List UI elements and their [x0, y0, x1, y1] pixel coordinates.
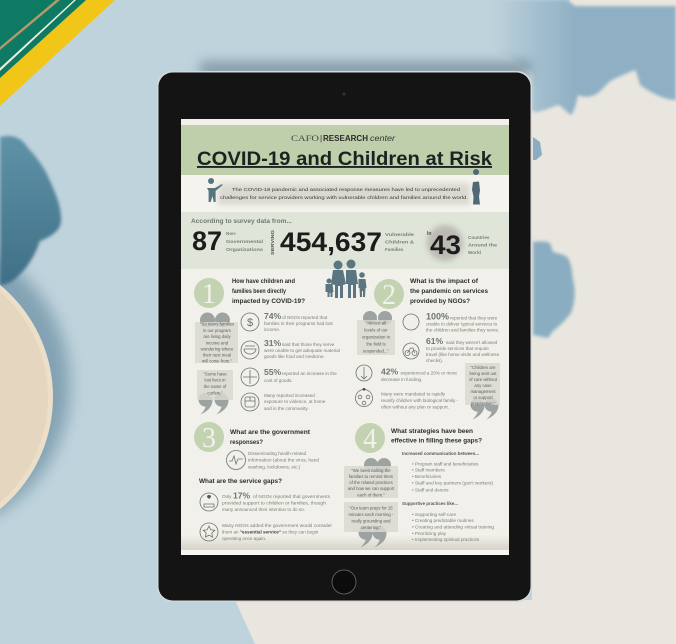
quote: calling the families: of the related practices	[349, 480, 393, 485]
list: increased communication	[402, 451, 493, 492]
list: supportive practices	[402, 501, 494, 542]
quote: children sent out of care: "Children are	[471, 365, 496, 370]
stat: 87	[192, 226, 264, 256]
item: essential service: Many NGOs added the government would consider	[222, 523, 332, 528]
background: plate shadow	[0, 235, 70, 535]
stat: 31% material goods: 31%	[264, 338, 282, 348]
logo line: center	[370, 134, 395, 143]
stat: 100%: 100%	[426, 312, 449, 322]
stat: violence exposure	[241, 393, 326, 411]
stat: 61%: to provide services that require	[426, 346, 489, 351]
list: supportive practices: • Supporting self-care	[412, 512, 456, 517]
quote: children sent out of care: of care without	[469, 377, 498, 382]
item: disseminating information: information (about the virus, hand	[248, 458, 319, 462]
item: disseminating information: washing, lockdowns, etc.)	[248, 464, 301, 470]
title: COVID-19 and Children at Risk	[197, 149, 492, 170]
quote: families losing income: are living daily	[203, 334, 231, 339]
tablet body	[157, 71, 532, 602]
item: 17%: provided support to children or families, though	[222, 500, 326, 506]
heading 3: What are the government	[230, 429, 311, 436]
stat: 42%: decrease in funding.	[381, 377, 422, 382]
quote: families losing income: income and	[206, 340, 229, 346]
quote: work suspended: suspended..."	[363, 348, 390, 354]
logo line	[291, 134, 395, 143]
quote: children sent out of care: preparation."	[471, 401, 496, 406]
item: 17%: Only	[222, 494, 232, 499]
quote: calling the families: and how we can support	[348, 486, 395, 491]
quote: lives lost	[197, 370, 233, 414]
quote: families losing income: their next meal	[203, 352, 231, 358]
stat: 61%: 61%	[426, 336, 444, 346]
stat: reunify children: often without any plan or support.	[381, 404, 449, 410]
stat: 43 countries: 43	[430, 230, 461, 260]
list: increased communication: • Staff and key partners (gov't workers)	[412, 480, 493, 486]
stat: 100%: the children and families they serve.	[426, 328, 499, 332]
survey heading: According to survey data from...	[191, 219, 292, 225]
quote: families losing income: will come from."	[202, 358, 233, 364]
stat: 100%: unable to deliver typical services to	[426, 322, 498, 326]
item: 17%	[200, 490, 331, 512]
stat: 74% income: of NGOs reported that	[282, 315, 328, 320]
quote: work suspended: "Almost all	[366, 320, 386, 326]
quote: team prays: minutes each morning -	[349, 512, 394, 517]
stat: 42%	[356, 365, 457, 382]
intro bar: The COVID-19 pandemic and associated response measures have led to unprecedented	[232, 187, 460, 193]
quote: calling the families	[344, 458, 398, 498]
quote: lives lost: the name of	[204, 384, 227, 389]
item: 17%: of NGOs reported that governments	[253, 494, 331, 499]
quote: team prays: really grounding and	[352, 518, 391, 524]
stat: violence exposure: exposure to violence, at home	[264, 399, 326, 404]
stat: reunify children	[356, 388, 459, 410]
quote: families losing income: "So many families	[200, 322, 234, 326]
quote: families losing income: in our program	[203, 328, 231, 333]
stat: 87: Organizations	[226, 247, 264, 252]
stat: 454,637: Children &	[385, 240, 415, 244]
stat: 43 countries: Around the	[468, 242, 498, 248]
quote: work suspended	[357, 311, 395, 355]
book spine corner	[0, 0, 115, 106]
stat: 55% cost of goods	[241, 367, 337, 386]
quote: team prays	[344, 502, 398, 548]
intro bar	[181, 169, 509, 212]
stat: 74% income: families in their programs had lost	[264, 321, 333, 326]
quote: children sent out of care: management	[470, 389, 496, 394]
quote: children sent out of care: being sent out	[470, 371, 497, 376]
stat: 31% material goods: said that those they serve	[282, 342, 335, 347]
stat: 87: Non-	[226, 231, 237, 236]
serving label: SERVING	[270, 229, 275, 255]
item: essential service	[200, 523, 332, 541]
bottom fade	[181, 535, 509, 550]
heading 2: What is the impact of	[410, 278, 479, 285]
stat: 454,637: Vulnerable	[385, 232, 415, 237]
stat: 454,637: Families	[385, 247, 404, 252]
stat: violence exposure: Many reported increased	[264, 393, 315, 398]
quote: team prays: "Our team prays for 15	[349, 506, 393, 510]
number badge 2: 2	[382, 280, 396, 311]
quote: calling the families: "We been calling the	[351, 468, 391, 473]
quote: work suspended: organization in	[362, 334, 391, 340]
section 2: impact on services	[356, 278, 500, 420]
stat: reunify children: reunify children with biological family -	[381, 398, 459, 403]
stat: 42%: 42%	[381, 366, 399, 376]
bottom strip	[181, 550, 509, 555]
quote: children sent out of care: any case	[474, 383, 492, 388]
background: dark blue stain left	[0, 136, 61, 285]
stat: 100%	[403, 312, 499, 332]
number badge 4	[355, 423, 385, 455]
stat: 55% cost of goods: 55%	[264, 367, 282, 377]
quote: work suspended: levels of our	[364, 328, 388, 332]
saucer plate	[0, 252, 53, 542]
stat: 454,637: 454,637	[280, 227, 382, 257]
stat: 61%: travel (like home visits and wellness	[426, 352, 500, 357]
list: increased communication: • Program staff and beneficiaries	[412, 462, 479, 466]
stat: 74% income: income.	[264, 327, 280, 332]
heading 4: What strategies have been	[391, 428, 473, 435]
stat: reunify children: Many were mandated to rapidly	[381, 392, 446, 396]
number badge 4: 4	[363, 424, 377, 455]
quote: lives lost: "Some have	[203, 372, 227, 376]
quote: calling the families: families to remind them	[349, 474, 394, 479]
list: increased communication: • Beneficiaries	[412, 474, 442, 479]
tablet shadow	[200, 62, 530, 76]
icon: child figure	[207, 178, 223, 202]
list: increased communication: • Staff members	[412, 468, 445, 472]
list: supportive practices: Supportive practices like...	[402, 501, 458, 506]
stat: 87: Governmental	[226, 239, 263, 244]
section 4: effective strategies	[344, 423, 494, 548]
list: supportive practices: • Implementing spiritual practices	[412, 537, 480, 542]
quote: families losing income	[195, 312, 238, 364]
stat: 74% income	[241, 311, 333, 332]
item: 17%: 17%	[233, 490, 251, 500]
quote: lives lost: curfew."	[207, 390, 223, 396]
heading 3: responses?	[230, 439, 263, 446]
quote: work suspended: the field is	[366, 342, 386, 346]
quote: calling the families: each of them."	[357, 492, 385, 498]
item: 17%: many announced their intention to do so.	[222, 507, 305, 512]
heading 3	[230, 429, 311, 446]
number badge 2	[374, 279, 404, 311]
stat: 31% material goods: were unable to get adequate material	[264, 348, 340, 353]
stat: 31% material goods: goods like food and medicine.	[264, 354, 325, 359]
heading 2	[410, 278, 488, 305]
stat: 55% cost of goods: reported an increase in the	[282, 371, 337, 376]
stat: 74% income: 74%	[264, 311, 282, 321]
stat: 61%: said they weren't allowed	[446, 340, 498, 345]
stat: 61%: checks).	[426, 358, 443, 363]
quote: children sent out of care: or support	[473, 395, 493, 400]
item: essential service: operating once again.	[222, 536, 266, 541]
item: essential service: them an "essential service" so they can begin	[222, 530, 319, 534]
heading 4: effective in filling these gaps?	[391, 438, 482, 444]
number badge 1	[194, 278, 224, 310]
stat: 43 countries: Countries	[468, 235, 490, 240]
quote: children sent out of care	[465, 363, 500, 420]
list: supportive practices: • Creating and attending virtual training	[412, 524, 494, 530]
heading 4	[391, 428, 482, 444]
list: supportive practices: • Creating predictable routines	[412, 518, 474, 523]
background: blue stain right	[533, 241, 575, 338]
number badge 3: 3	[202, 423, 216, 454]
stat: 43 countries: World	[468, 250, 481, 255]
heading 1: How have children and	[232, 278, 295, 285]
heading 2: the pandemic on services	[410, 288, 488, 295]
background: small blue stain	[533, 137, 542, 160]
section 1: children and families impact	[194, 278, 340, 414]
header band	[181, 125, 509, 175]
item: disseminating information: Disseminating health-related	[248, 451, 307, 456]
stat: 55% cost of goods: cost of goods.	[264, 378, 293, 383]
home button	[332, 570, 356, 594]
heading: service gaps: What are the service gaps?	[199, 478, 282, 485]
list: supportive practices: • Prioritizing play	[412, 531, 447, 536]
survey stats band	[181, 212, 509, 269]
heading 1	[232, 278, 305, 305]
stat: 100%: reported that they were	[450, 316, 498, 320]
stat: 74% income: $	[247, 317, 253, 329]
stat: 43 countries	[427, 225, 498, 261]
number badge 1: 1	[202, 279, 216, 310]
infographic screen	[181, 119, 509, 555]
icon: woman figure	[472, 169, 480, 204]
stat: 61%	[403, 336, 500, 363]
quote: families losing income: wondering where	[201, 346, 234, 352]
heading 2: provided by NGOs?	[410, 298, 470, 305]
logo line: |	[320, 134, 322, 143]
intro bar: challenges for service providers working with vulnerable children and families around the world.	[220, 195, 468, 201]
heading 1: families been directly	[232, 288, 286, 295]
stat: 31% material goods	[241, 338, 340, 359]
icon: family silhouette	[326, 260, 366, 298]
stat: violence exposure: and in the community.	[264, 406, 309, 411]
stat: 87: 87	[192, 226, 222, 256]
heading 1: impacted by COVID-19?	[232, 298, 305, 305]
quote: team prays: centering."	[361, 525, 382, 530]
item: disseminating information	[226, 450, 319, 470]
logo line: RESEARCH	[323, 134, 368, 143]
quote: lives lost: lost lives in	[204, 378, 226, 382]
logo line: CAFO	[291, 134, 319, 143]
list: increased communication: Increased communication between...	[402, 451, 479, 456]
section 3: government responses	[194, 422, 332, 541]
list: increased communication: • Staff and donors	[412, 488, 449, 492]
stat: 43 countries: In	[427, 231, 431, 237]
stat: 42%: experienced a 20% or more	[400, 370, 457, 376]
